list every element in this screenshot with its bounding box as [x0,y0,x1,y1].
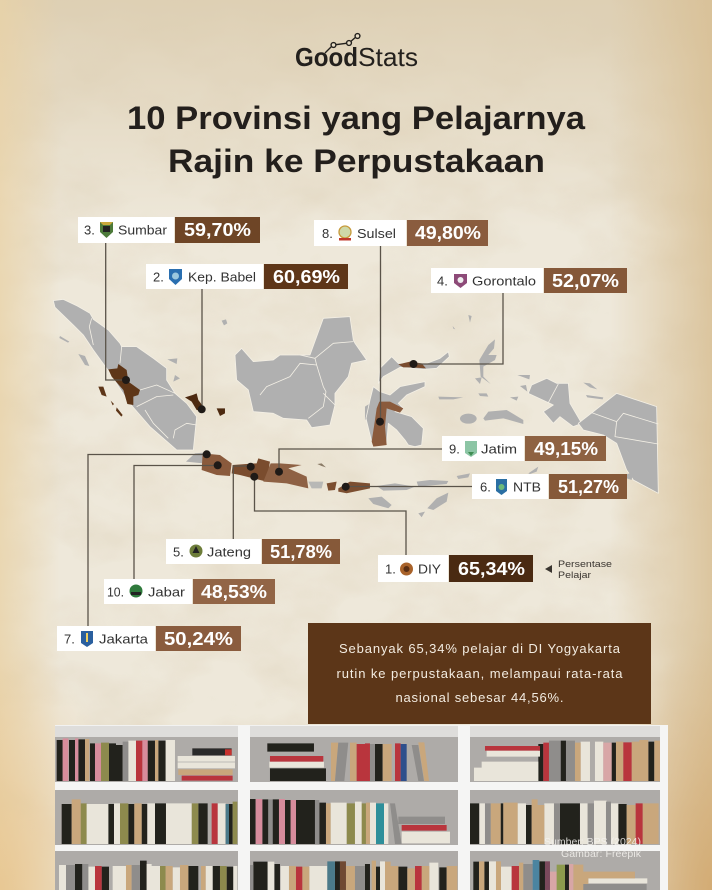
label: Jakarta [57,626,241,651]
shelf backs [55,737,660,890]
source credit: Gambar: Freepik [561,848,642,860]
Gorontalo [398,362,426,368]
shelf boards and dividers [55,725,668,890]
logo: GoodStats [295,34,418,72]
label: Jabar [104,579,275,604]
title [127,100,585,179]
label: Kep. Babel: Kep. Babel [188,270,256,284]
Banten [186,453,203,463]
label: Sulsel [314,220,488,246]
map: Indonesia [53,299,658,517]
books: left column [57,738,370,890]
legend: Persentase Pelajar [545,559,612,581]
label: Jakarta: Jakarta [99,632,149,646]
map: western islands [53,299,370,493]
title: 10 Provinsi yang Pelajarnya [127,100,585,136]
label: Sulsel: 8. [322,226,333,241]
Sulsel [372,402,403,447]
label: Kep. Babel: 2. [153,270,164,284]
books: right columns [370,740,660,890]
source credit [544,836,642,860]
icon: Sumbar emblem [100,222,113,238]
label: Jateng: Jateng [207,544,251,560]
label: Sumbar: 3. [84,222,95,238]
label: DIY: DIY [418,562,441,576]
bookshelf [55,725,668,890]
label: Jateng: 51,78% [270,542,332,562]
callout: summary: nasional sebesar 44,56%. [396,690,564,705]
label: Jateng [166,539,340,564]
icon: NTB emblem [496,479,507,495]
source credit: Sumber: BPS (2024) [544,836,641,848]
Kep. Babel [185,393,225,416]
map: eastern islands [366,315,658,517]
leader lines [88,243,503,626]
Papua [528,378,582,427]
label: Gorontalo [431,268,627,293]
icon: Jatim emblem [465,441,477,457]
label: Sulsel: Sulsel [357,226,396,241]
Jabar [202,453,232,476]
label: Sumbar: 59,70% [184,220,251,240]
label: DIY: 65,34% [458,559,525,579]
icon: Babel emblem [169,269,182,285]
label: Jatim: 9. [449,442,460,456]
icon: Jabar emblem [130,584,142,598]
callout: summary: rutin ke perpustakaan, melampaui rata-rata [336,666,623,681]
icon: DIY emblem [400,562,413,576]
label: NTB: NTB [513,480,541,494]
Jateng [232,458,270,482]
label: Jabar: 48,53% [201,582,267,602]
label: Jakarta: 50,24% [164,629,233,649]
legend: Persentase Pelajar: Persentase [558,559,612,570]
label: Gorontalo: 4. [437,274,448,288]
icon: Gorontalo emblem [454,274,467,288]
label: NTB: 6. [480,480,491,494]
map dots [122,360,418,491]
label: Kep. Babel: 60,69% [273,267,340,287]
Jatim [263,463,308,488]
icon: Jakarta emblem [81,631,93,647]
Sumbar [108,364,140,405]
label: Jakarta: 7. [64,632,75,646]
label: Sumbar: Sumbar [118,222,168,238]
logo: GoodStats: Good [295,42,358,72]
label: Jabar: 10. [107,584,124,600]
NTB west [327,482,370,493]
label: Gorontalo: 52,07% [552,271,619,291]
Sumatra [53,299,197,450]
callout: summary: Sebanyak 65,34% pelajar di DI Yogyakarta [339,641,621,656]
icon: Sulsel emblem [339,226,351,240]
label: Jatim: Jatim [481,442,517,456]
label: DIY [378,555,533,582]
label: Jateng: 5. [173,544,184,560]
label: NTB [472,474,627,499]
Sulawesi [378,352,449,383]
legend: Persentase Pelajar: Pelajar [558,570,591,581]
label: Gorontalo: Gorontalo [472,274,536,288]
label: NTB: 51,27% [558,477,619,497]
label: DIY: 1. [385,562,396,576]
callout: summary [308,623,651,724]
Kalimantan [235,317,367,428]
label: Sulsel: 49,80% [415,223,481,243]
Nusa Tenggara [368,480,448,517]
label: Jabar: Jabar [148,584,186,600]
Maluku [438,315,530,401]
label: Jatim [442,436,606,461]
Bali [308,482,323,488]
label: Sumbar [78,217,260,243]
title: Rajin ke Perpustakaan [168,143,545,179]
logo: GoodStats: Stats [358,42,418,72]
label: Kep. Babel [146,264,348,289]
label: Jatim: 49,15% [534,439,598,459]
icon: Jateng emblem [190,544,202,558]
